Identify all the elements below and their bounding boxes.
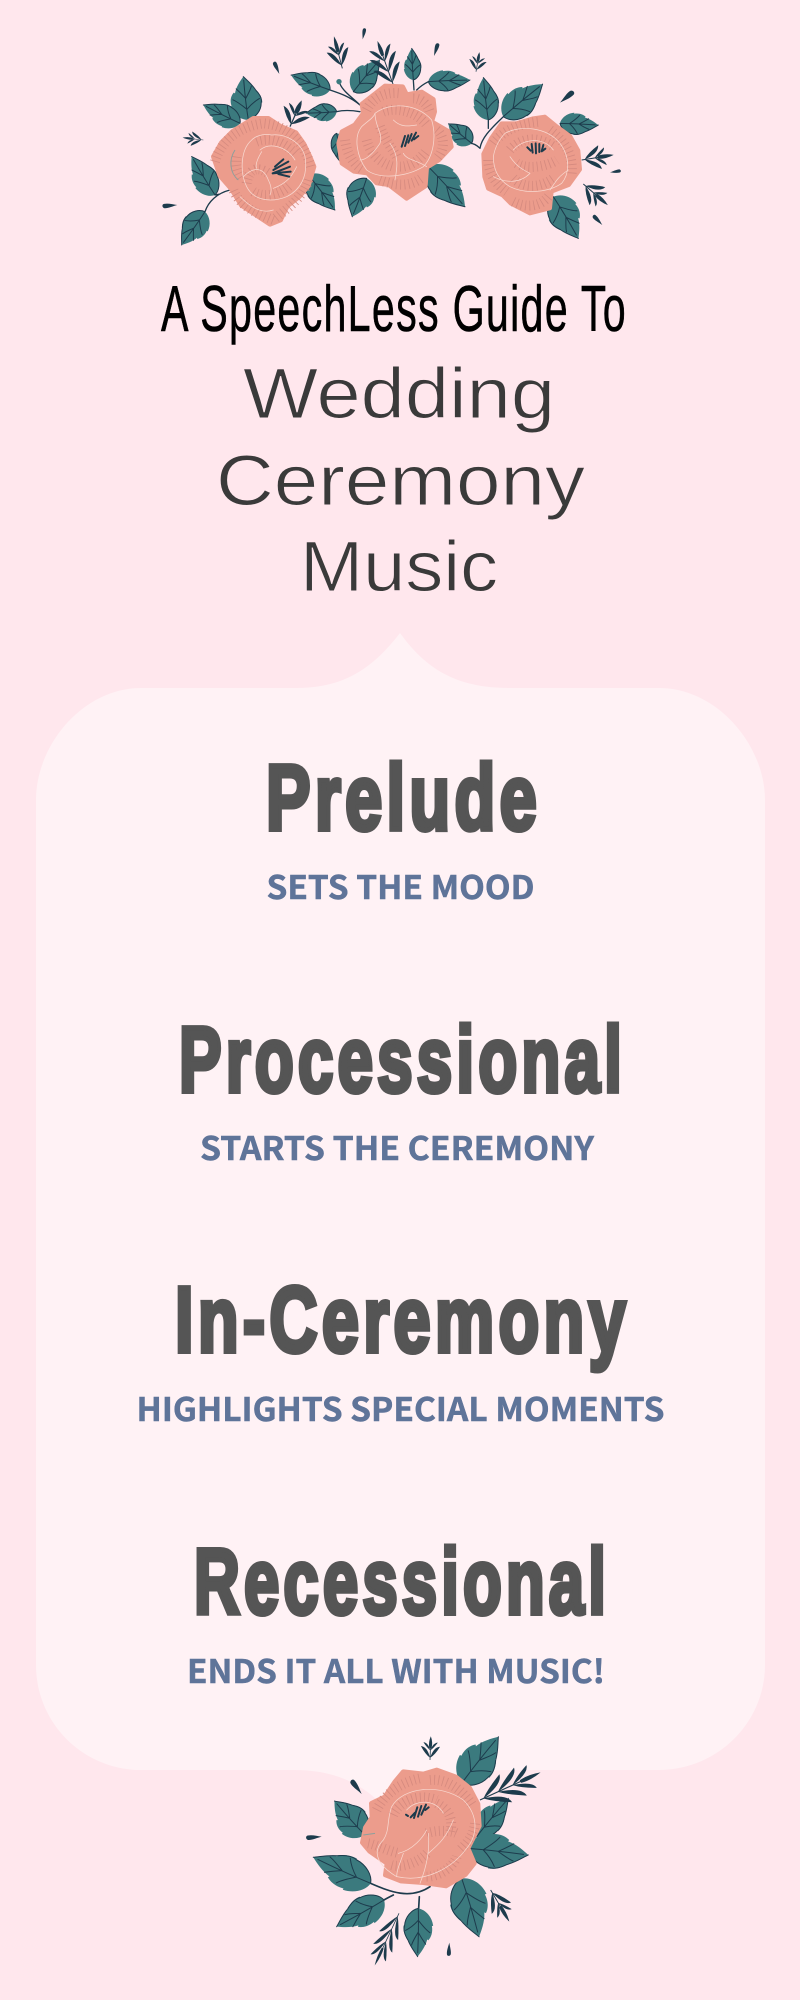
rose: bouquet [362, 1770, 479, 1886]
stage caption: sets the mood: SETS THE MOOD [266, 862, 534, 909]
leaves [306, 1725, 530, 1957]
stage caption: ends it all with music: ENDS IT ALL WITH MUSIC! [187, 1646, 605, 1693]
stage caption: starts the ceremony: STARTS THE CEREMONY [200, 1123, 595, 1170]
stage heading: Prelude: Prelude [266, 746, 541, 850]
stage caption: highlights special moments: HIGHLIGHTS SPECIAL MOMENTS [136, 1384, 664, 1431]
stage heading: Recessional: Recessional [194, 1530, 610, 1634]
stems [205, 80, 503, 212]
stems [371, 1883, 430, 1908]
panel: music stages card [36, 633, 765, 1825]
rose: centre [339, 86, 451, 198]
rose: right [484, 117, 580, 213]
title: Wedding: Wedding [243, 355, 555, 434]
title: Ceremony: Ceremony [216, 442, 586, 521]
sprigs [365, 1736, 547, 1970]
illustration: bottom rose bouquet [306, 1725, 547, 1970]
stage heading: In-Ceremony: In-Ceremony [175, 1268, 630, 1372]
title: Music: Music [300, 528, 498, 607]
rose: left [213, 118, 314, 224]
falling petals [306, 1779, 452, 1956]
sprigs [182, 33, 616, 214]
leaves [171, 48, 599, 253]
illustration: top floral garland [162, 28, 621, 253]
falling petals [162, 28, 621, 227]
